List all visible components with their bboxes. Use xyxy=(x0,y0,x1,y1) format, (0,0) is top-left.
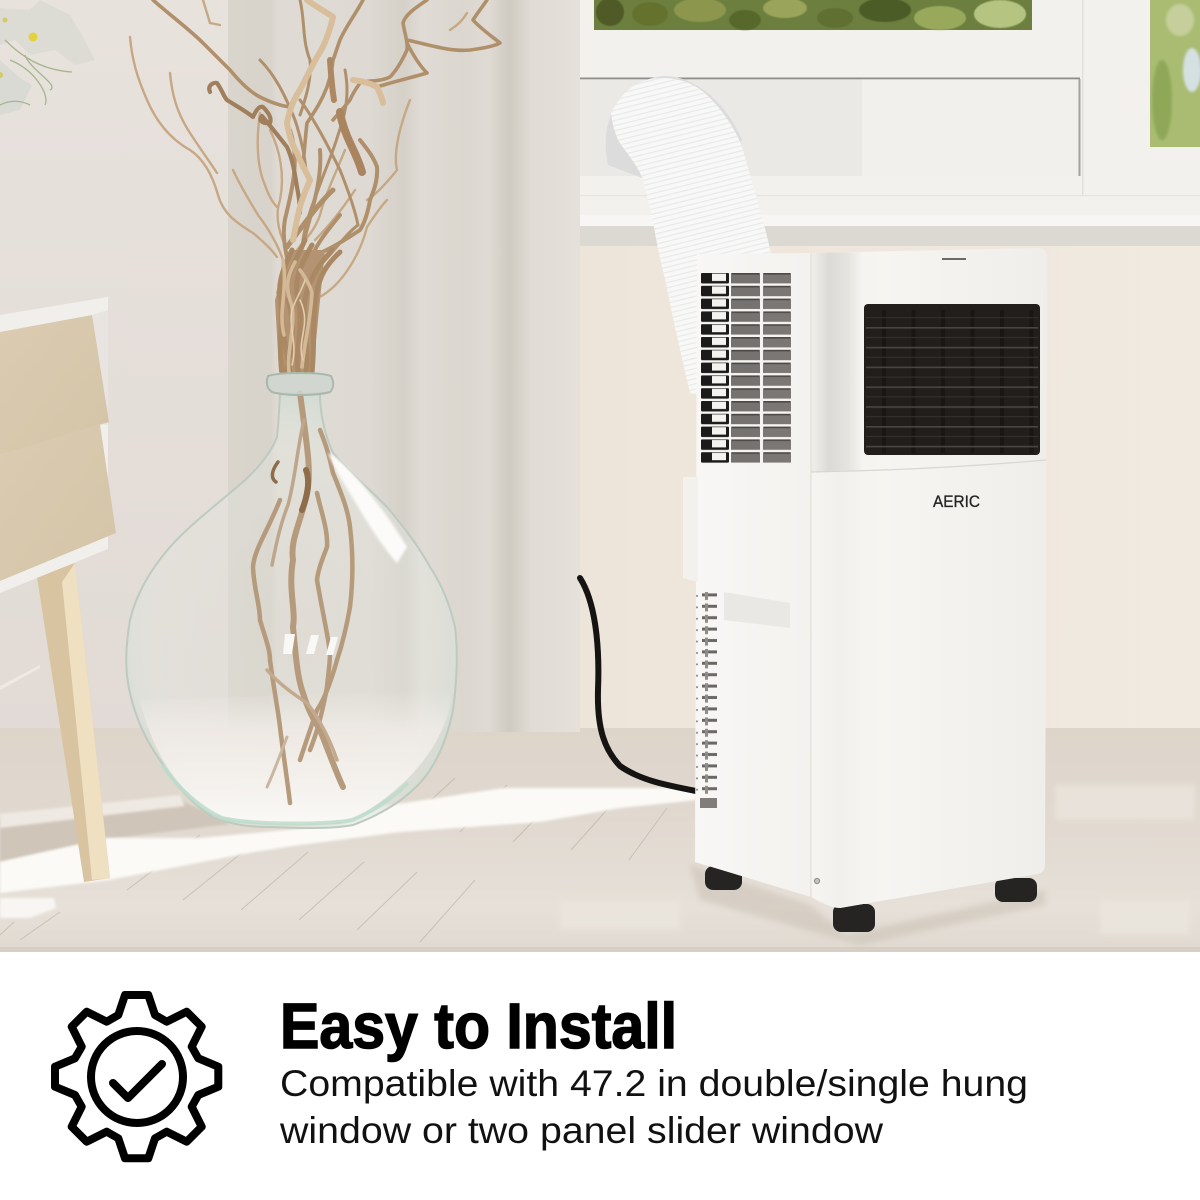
vase neck xyxy=(267,373,333,395)
table wood drawers xyxy=(0,315,109,455)
window sill xyxy=(580,215,1200,246)
flowers top left xyxy=(0,0,95,115)
sunlight patches on floor xyxy=(0,788,696,918)
branches in vase xyxy=(253,393,352,803)
curl dark xyxy=(209,83,300,213)
hose window adapter xyxy=(606,76,742,200)
window reflection in vase xyxy=(283,634,338,655)
icon: gear with check mark xyxy=(55,995,218,1158)
baseboard left xyxy=(0,665,40,690)
window view left xyxy=(594,0,1032,30)
bottom caption panel xyxy=(0,952,1200,1200)
side handle box xyxy=(683,477,698,582)
heading: Easy to Install xyxy=(280,990,677,1062)
exhaust hose xyxy=(606,76,771,395)
trunk bundle xyxy=(275,240,340,372)
description text: window or two panel slider window xyxy=(279,1110,883,1151)
portable air conditioner xyxy=(683,248,1047,932)
thick light branch xyxy=(287,0,383,240)
thick dark branch segment xyxy=(340,112,362,172)
right wall under window xyxy=(580,240,1200,735)
left wall xyxy=(0,0,240,760)
thin outer twigs xyxy=(130,0,467,300)
glass vase with branches xyxy=(126,0,500,828)
upper branches xyxy=(130,0,500,372)
side panel xyxy=(695,253,811,897)
sensor slit xyxy=(942,258,966,260)
description text xyxy=(279,1063,1028,1151)
vase highlight xyxy=(328,453,407,563)
floor xyxy=(0,728,1200,953)
side louvers xyxy=(701,273,791,465)
brand logo: AERIC xyxy=(933,492,980,511)
window slider panel xyxy=(580,78,1080,176)
side table xyxy=(0,297,116,882)
vase bottom green rim xyxy=(162,765,408,824)
corner bevel xyxy=(811,252,863,908)
window view right xyxy=(1150,0,1200,147)
caster wheels xyxy=(705,866,1037,932)
table white frame xyxy=(0,297,108,593)
power cord xyxy=(580,578,696,791)
side recess handle xyxy=(724,592,790,628)
window frame xyxy=(580,0,1200,246)
photo: room scene with portable air conditioner xyxy=(0,0,1200,953)
front panel xyxy=(811,248,1047,908)
vase body xyxy=(126,393,457,828)
floor shadow beside table xyxy=(0,800,230,862)
drain plug xyxy=(814,878,820,884)
lower side vent xyxy=(695,590,718,808)
curtain xyxy=(228,0,580,732)
vase lower reflection xyxy=(140,690,452,824)
shadow of unit on floor xyxy=(690,865,1045,945)
front air grille xyxy=(864,304,1040,455)
table leg xyxy=(37,563,110,882)
medium branches xyxy=(153,0,500,269)
description text: Compatible with 47.2 in double/single hung xyxy=(280,1063,1028,1104)
